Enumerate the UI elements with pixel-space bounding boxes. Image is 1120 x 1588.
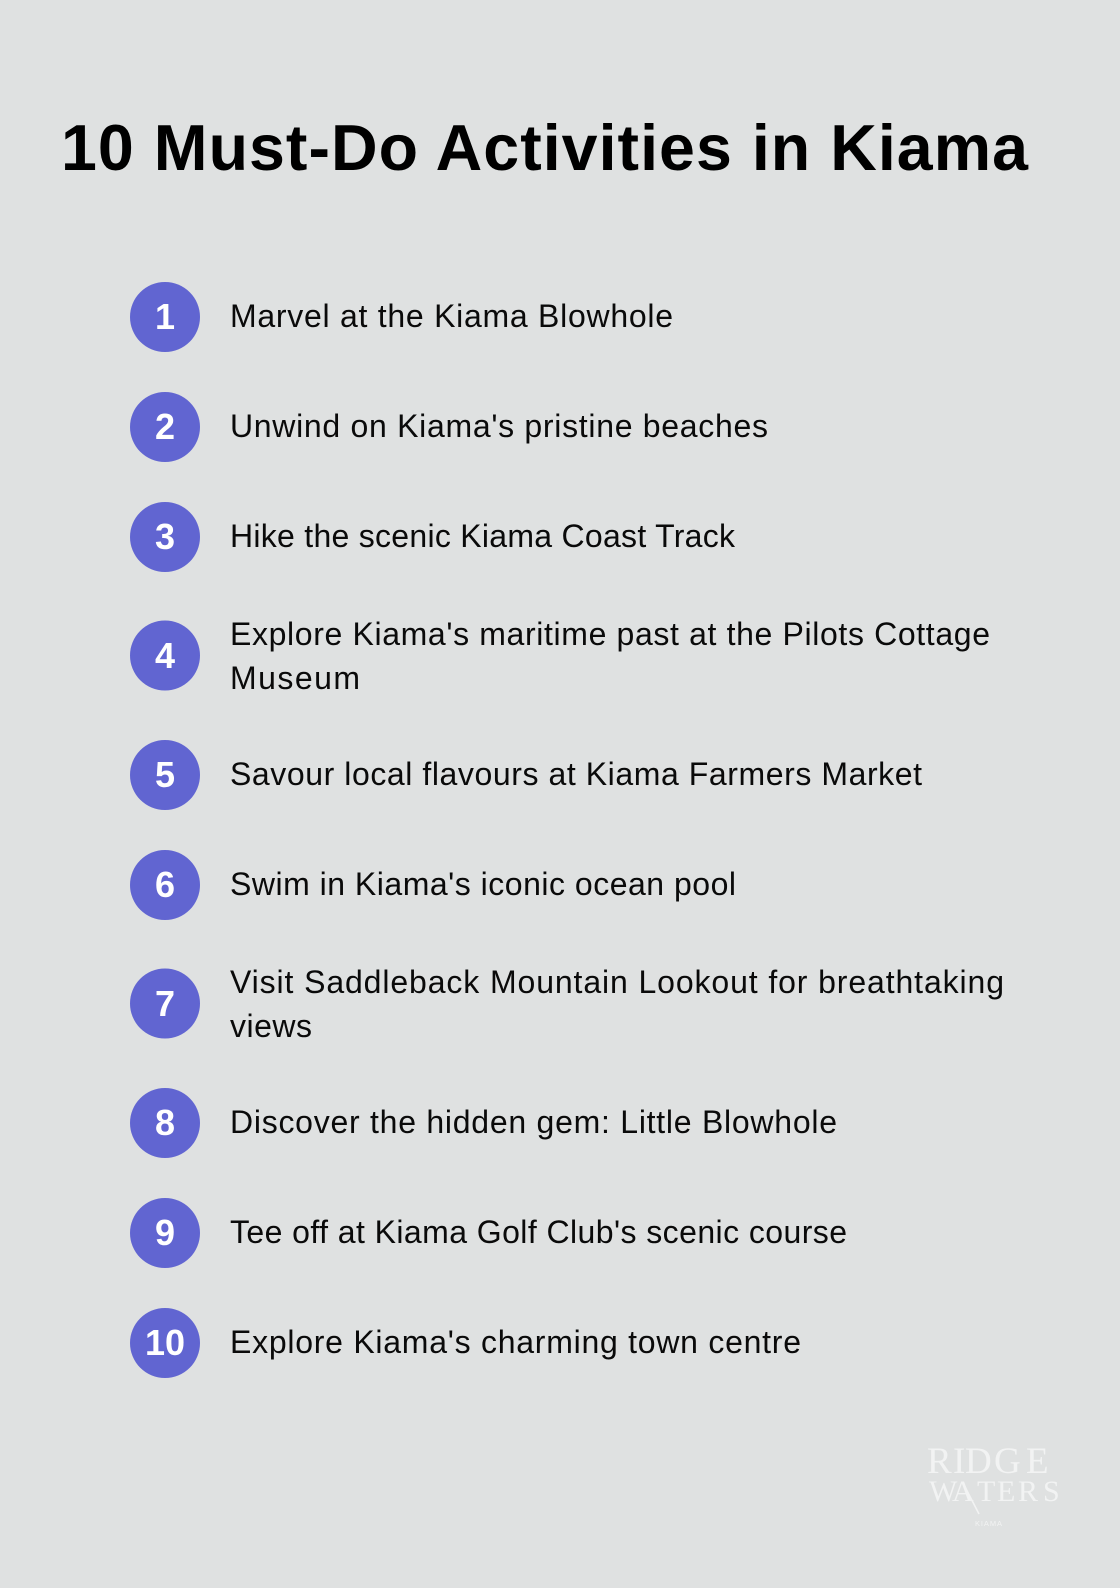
item 10: Explore Kiama's charming town centre [230,1324,801,1360]
logo: Ridge Waters Kiama [927,1441,1060,1528]
item 4: Explore Kiama's maritime past at the Pilots Cottage [230,616,990,652]
item 1: Marvel at the Kiama Blowhole [230,298,673,334]
item 8: 8 [155,1102,175,1143]
item 5: 5 [155,754,175,795]
item 7 [130,964,1004,1044]
item 5: Savour local flavours at Kiama Farmers Market [230,756,922,792]
item 8 [130,1088,837,1158]
item 4: Museum [230,660,360,696]
item 3: Hike the scenic Kiama Coast Track [230,518,736,554]
item 9: 9 [155,1212,175,1253]
item 1: 1 [155,296,175,337]
title: 10 Must-Do Activities in Kiama [61,112,1029,184]
item 3 [130,502,736,572]
item 5 [130,740,922,810]
item 8: Discover the hidden gem: Little Blowhole [230,1104,837,1140]
item 10: 10 [145,1322,185,1363]
item 10 [130,1308,801,1378]
item 6: Swim in Kiama's iconic ocean pool [230,866,736,902]
item 7: Visit Saddleback Mountain Lookout for breathtaking [230,964,1004,1000]
item 2: Unwind on Kiama's pristine beaches [230,408,768,444]
item 6: 6 [155,864,175,905]
item 6 [130,850,736,920]
item 9 [130,1198,847,1268]
item 4: 4 [155,635,175,676]
item 7: views [230,1008,312,1044]
item 7: 7 [155,983,175,1024]
item 9: Tee off at Kiama Golf Club's scenic course [230,1214,847,1250]
item 3: 3 [155,516,175,557]
logo: Ridge Waters Kiama: KIAMA [975,1519,1002,1528]
item 1 [130,282,673,352]
logo: Ridge Waters Kiama: RIDGE [927,1441,1049,1482]
item 4 [130,616,990,696]
item 2: 2 [155,406,175,447]
logo: Ridge Waters Kiama: WATERS [929,1475,1060,1508]
item 2 [130,392,768,462]
